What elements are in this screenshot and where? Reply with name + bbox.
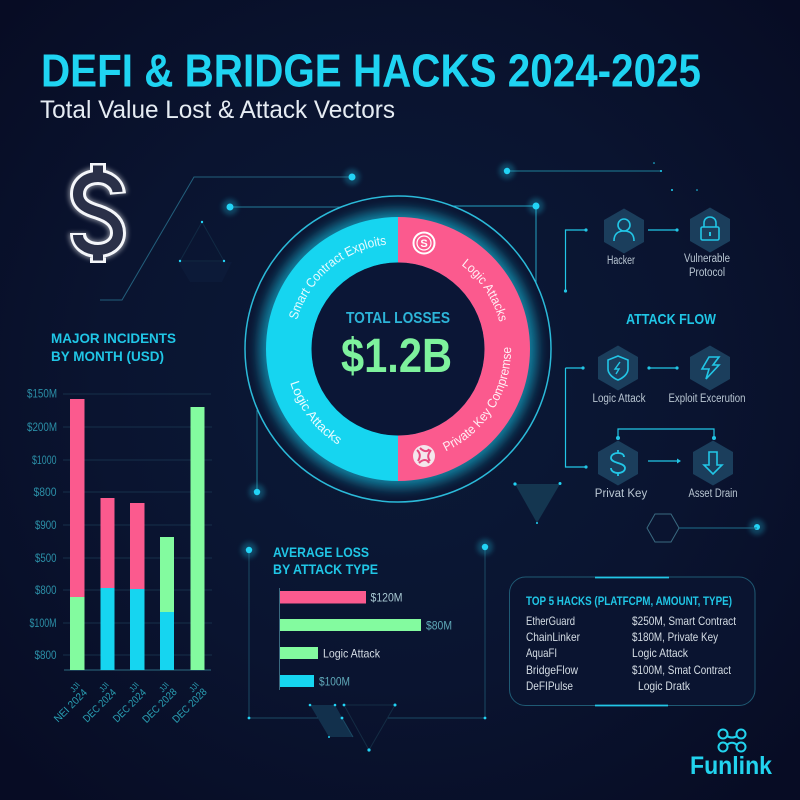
chart heading: BY ATTACK TYPE bbox=[273, 561, 378, 577]
icon: coin bbox=[414, 232, 434, 254]
panel: top 5 hacks table bbox=[510, 577, 755, 706]
table rows: $180M, Private Key bbox=[632, 630, 718, 644]
x axis labels: JJI bbox=[127, 681, 141, 694]
panel: average loss by attack type bbox=[273, 544, 452, 690]
node: logic attack bbox=[592, 346, 646, 405]
node: hacker: Hacker bbox=[607, 255, 635, 267]
chart heading bbox=[273, 544, 378, 577]
y axis labels: $900 bbox=[35, 518, 57, 532]
node: vulnerable protocol bbox=[684, 208, 730, 279]
chart heading bbox=[51, 330, 176, 364]
node: vulnerable protocol: Vulnerable bbox=[684, 253, 730, 265]
segment label: logic attacks left: Logic Attacks bbox=[290, 380, 341, 444]
y axis labels: $800 bbox=[34, 648, 57, 662]
table rows: Logic Dratk bbox=[638, 679, 691, 693]
center value: 1.2B: $1.2B bbox=[341, 330, 452, 383]
table rows: $100M, Smat Contract bbox=[632, 663, 732, 677]
icon: coin: S bbox=[420, 238, 428, 250]
bar group 3 bbox=[130, 503, 144, 670]
x axis labels: DEC 2024 bbox=[111, 687, 149, 725]
table rows: ChainLinker bbox=[526, 630, 580, 644]
x axis labels: JJI bbox=[68, 681, 82, 694]
y axis labels: $800 bbox=[34, 485, 57, 499]
x axis labels: DEC 2028 bbox=[170, 686, 210, 726]
x axis labels: DEC 2024 bbox=[81, 687, 119, 725]
chart heading: BY MONTH (USD) bbox=[51, 348, 164, 364]
node: private key: Privat Key bbox=[595, 488, 647, 500]
y axis labels: $100M bbox=[30, 616, 56, 630]
segment label: smart contract exploits: Smart Contract Exploits bbox=[289, 236, 386, 319]
x axis labels: JJI bbox=[187, 681, 201, 694]
icon: link logo bbox=[718, 730, 746, 752]
segment label: private key compromise: Private Key Compremse bbox=[442, 348, 512, 451]
center label: total losses: TOTAL LOSSES bbox=[346, 310, 450, 327]
connectors bbox=[564, 228, 716, 469]
node: logic attack: Logic Attack bbox=[592, 393, 646, 405]
bar: 120M: $120M bbox=[370, 590, 402, 604]
y axis labels: $200M bbox=[27, 420, 57, 434]
y axis labels bbox=[27, 386, 57, 662]
bar: 120M bbox=[280, 590, 402, 604]
donut segment: smart contract and logic (cyan) bbox=[266, 217, 398, 481]
bar: 80M bbox=[280, 618, 452, 632]
subtitle: Total Value Lost & Attack Vectors bbox=[40, 96, 395, 124]
bar group 4 bbox=[160, 537, 174, 670]
table rows: DeFIPulse bbox=[526, 679, 573, 693]
y axis labels: $1000 bbox=[32, 453, 57, 467]
bar: 80M: $80M bbox=[426, 618, 452, 632]
node: asset drain: Asset Drain bbox=[688, 488, 738, 500]
x axis labels: DEC 2028 bbox=[140, 686, 180, 726]
table heading: TOP 5 HACKS (PLATFCPM, AMOUNT, TYPE) bbox=[526, 596, 732, 608]
x axis labels bbox=[52, 681, 210, 726]
chart heading: AVERAGE LOSS bbox=[273, 544, 369, 560]
chart heading: MAJOR INCIDENTS bbox=[51, 330, 176, 346]
table rows bbox=[526, 614, 737, 693]
icon: glowing dollar sign bbox=[78, 163, 118, 263]
node: hacker bbox=[604, 208, 644, 267]
y axis labels: $800 bbox=[35, 583, 57, 597]
panel: major incidents chart bbox=[27, 330, 212, 726]
bar: 100M: $100M bbox=[319, 674, 350, 688]
bar group 1 bbox=[70, 399, 84, 670]
x axis labels: JJI bbox=[157, 681, 171, 694]
node: exploit execution: Exploit Excerution bbox=[668, 393, 746, 405]
segment label: logic attacks right: Logic Attacks bbox=[462, 258, 506, 322]
y axis labels: $150M bbox=[27, 386, 57, 400]
bar: logic attack bbox=[280, 646, 381, 660]
node: exploit execution bbox=[668, 346, 746, 405]
table rows: EtherGuard bbox=[526, 614, 575, 628]
logo: Funlink: Funlink bbox=[690, 752, 772, 780]
node: vulnerable protocol: Protocol bbox=[689, 267, 725, 279]
bar group 2 bbox=[100, 498, 114, 670]
node: asset drain bbox=[688, 440, 738, 500]
bar: logic attack: Logic Attack bbox=[323, 646, 381, 660]
flow heading: ATTACK FLOW bbox=[626, 311, 717, 328]
table rows: AquaFI bbox=[526, 646, 557, 660]
icon: swirl bbox=[413, 445, 435, 467]
panel: attack flow bbox=[564, 208, 746, 500]
x axis labels: JJI bbox=[97, 681, 111, 694]
y axis labels: $500 bbox=[35, 551, 57, 565]
bar 5 bbox=[190, 407, 204, 670]
bar: 100M bbox=[280, 674, 350, 688]
table rows: Logic Attack bbox=[632, 646, 689, 660]
table rows: BridgeFlow bbox=[526, 663, 578, 677]
donut chart: total losses bbox=[244, 195, 552, 503]
x axis labels: NEI 2024 bbox=[52, 687, 90, 725]
table rows: $250M, Smart Contract bbox=[632, 614, 737, 628]
title: DEFI & BRIDGE HACKS 2024-2025 bbox=[41, 44, 701, 96]
donut segment: logic and private key (pink) bbox=[398, 217, 530, 481]
node: private key bbox=[595, 440, 647, 500]
logo: Funlink bbox=[690, 730, 772, 780]
